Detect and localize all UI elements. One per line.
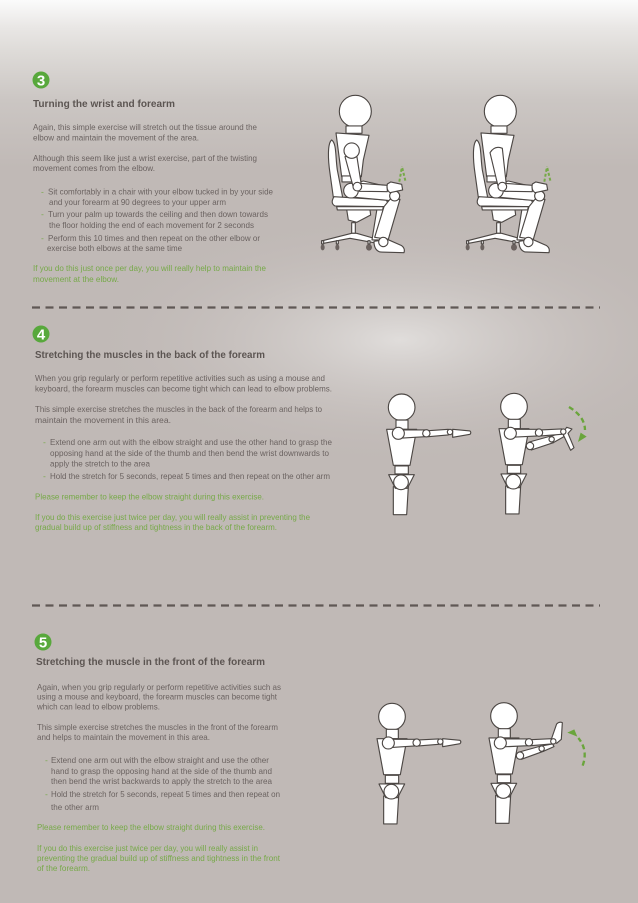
instruction list: and your forearm at 90 degrees to your upper arm bbox=[49, 197, 226, 207]
green callout: of the forearm. bbox=[37, 863, 90, 873]
intro text bbox=[35, 373, 332, 425]
green callout bbox=[33, 263, 266, 284]
green callout: If you do this exercise just twice per day, you will really assist in bbox=[37, 843, 258, 853]
instruction list: Hold the stretch for 5 seconds, repeat 5 times and then repeat on bbox=[51, 789, 280, 799]
green callout bbox=[37, 822, 281, 873]
instruction list: opposing hand at the side of the thumb and then bend the wrist downwards to bbox=[50, 448, 329, 458]
intro text: and helps to maintain the movement in this area. bbox=[37, 732, 210, 742]
number badge 5: 5 bbox=[39, 634, 47, 652]
figure: arm extended bbox=[387, 394, 471, 515]
intro text: This simple exercise stretches the muscles in the front of the forearm bbox=[37, 722, 278, 732]
instruction list: the floor holding the end of each movement for 2 seconds bbox=[49, 220, 254, 230]
instruction list: apply the stretch to the area bbox=[50, 458, 150, 468]
intro text: using a mouse and keyboard, the forearm muscles can become tight bbox=[37, 692, 278, 702]
instruction list: - bbox=[45, 755, 48, 765]
arrow: rotation bbox=[399, 167, 405, 182]
green callout bbox=[35, 492, 310, 532]
intro text: When you grip regularly or perform repetitive activities such as using a mouse and bbox=[35, 373, 325, 383]
heading: Stretching the muscle in the front of the forearm bbox=[36, 657, 265, 668]
green callout: Please remember to keep the elbow straight during this exercise. bbox=[37, 822, 265, 832]
instruction list: Turn your palm up towards the ceiling and then down towards bbox=[48, 209, 268, 219]
arrow: upward bbox=[567, 729, 585, 766]
green callout: preventing the gradual build up of stiffness and tightness in the front bbox=[37, 853, 281, 863]
number badge 5 bbox=[34, 634, 52, 652]
heading: Stretching the muscles in the back of the forearm bbox=[35, 350, 265, 361]
intro text: keyboard, the forearm muscles can become tight which can lead to elbow problems. bbox=[35, 384, 332, 394]
number badge 4: 4 bbox=[37, 326, 46, 344]
instruction list: then bend the wrist backwards to apply the stretch to the area bbox=[51, 776, 272, 786]
green callout: Please remember to keep the elbow straight during this exercise. bbox=[35, 492, 264, 502]
instruction list: Perform this 10 times and then repeat on the other elbow or bbox=[48, 233, 260, 243]
intro text: This simple exercise stretches the muscles in the back of the forearm and helps to bbox=[35, 404, 322, 414]
figure: seated, forearm turned up bbox=[466, 95, 550, 253]
intro text bbox=[36, 682, 281, 742]
instruction list: Hold the stretch for 5 seconds, repeat 5 times and then repeat on the other arm bbox=[50, 471, 330, 481]
instruction list: hand to grasp the opposing hand at the side of the thumb and bbox=[51, 766, 272, 776]
divider bbox=[32, 604, 600, 607]
instruction list: - bbox=[41, 209, 44, 219]
instruction list: exercise both elbows at the same time bbox=[47, 243, 182, 253]
green callout: If you do this just once per day, you will really help to maintain the bbox=[33, 263, 266, 273]
intro text: Again, when you grip regularly or perform repetitive activities such as bbox=[37, 682, 281, 692]
divider bbox=[32, 306, 600, 309]
section 4: stretching the back of the forearm bbox=[32, 326, 587, 532]
number badge 3: 3 bbox=[37, 72, 45, 90]
number badge 4 bbox=[32, 326, 50, 344]
figure: seated, forearm turned down bbox=[321, 95, 405, 253]
figure: wrist bent down bbox=[499, 393, 587, 514]
intro text bbox=[33, 122, 257, 173]
section 3: turning the wrist and forearm bbox=[32, 72, 550, 284]
instruction list: - bbox=[43, 437, 46, 447]
intro text: Although this seem like just a wrist exercise, part of the twisting bbox=[33, 153, 257, 163]
instruction list: - bbox=[41, 233, 44, 243]
figure: arm extended bbox=[377, 703, 461, 824]
intro text: movement comes from the elbow. bbox=[33, 163, 155, 173]
instruction list bbox=[43, 437, 332, 481]
instruction list: - bbox=[43, 471, 46, 481]
intro text: which can lead to elbow problems. bbox=[36, 702, 160, 712]
intro text: elbow and maintain the movement of the area. bbox=[33, 132, 199, 142]
instruction list: Extend one arm out with the elbow straight and use the other bbox=[51, 755, 269, 765]
green callout: movement at the elbow. bbox=[33, 274, 119, 284]
instruction list: Extend one arm out with the elbow straight and use the other hand to grasp the bbox=[50, 437, 332, 447]
instruction list bbox=[45, 755, 280, 812]
intro text: maintain the movement in this area. bbox=[35, 415, 171, 425]
figure: wrist bent back bbox=[489, 703, 585, 823]
instruction list: - bbox=[45, 789, 48, 799]
green callout: If you do this exercise just twice per day, you will really assist in preventing the bbox=[35, 512, 310, 522]
arrow: downward bbox=[569, 407, 587, 442]
instruction list: the other arm bbox=[51, 802, 99, 812]
number badge 3 bbox=[32, 72, 50, 90]
section 5: stretching the front of the forearm bbox=[34, 634, 585, 873]
green callout: gradual build up of stiffness and tightness in the back of the forearm. bbox=[35, 522, 277, 532]
heading: Turning the wrist and forearm bbox=[33, 99, 175, 110]
intro text: Again, this simple exercise will stretch out the tissue around the bbox=[33, 122, 257, 132]
instruction list: - bbox=[41, 186, 44, 196]
instruction list bbox=[41, 186, 273, 253]
arrow: rotation bbox=[544, 167, 550, 182]
instruction list: Sit comfortably in a chair with your elbow tucked in by your side bbox=[48, 186, 273, 196]
